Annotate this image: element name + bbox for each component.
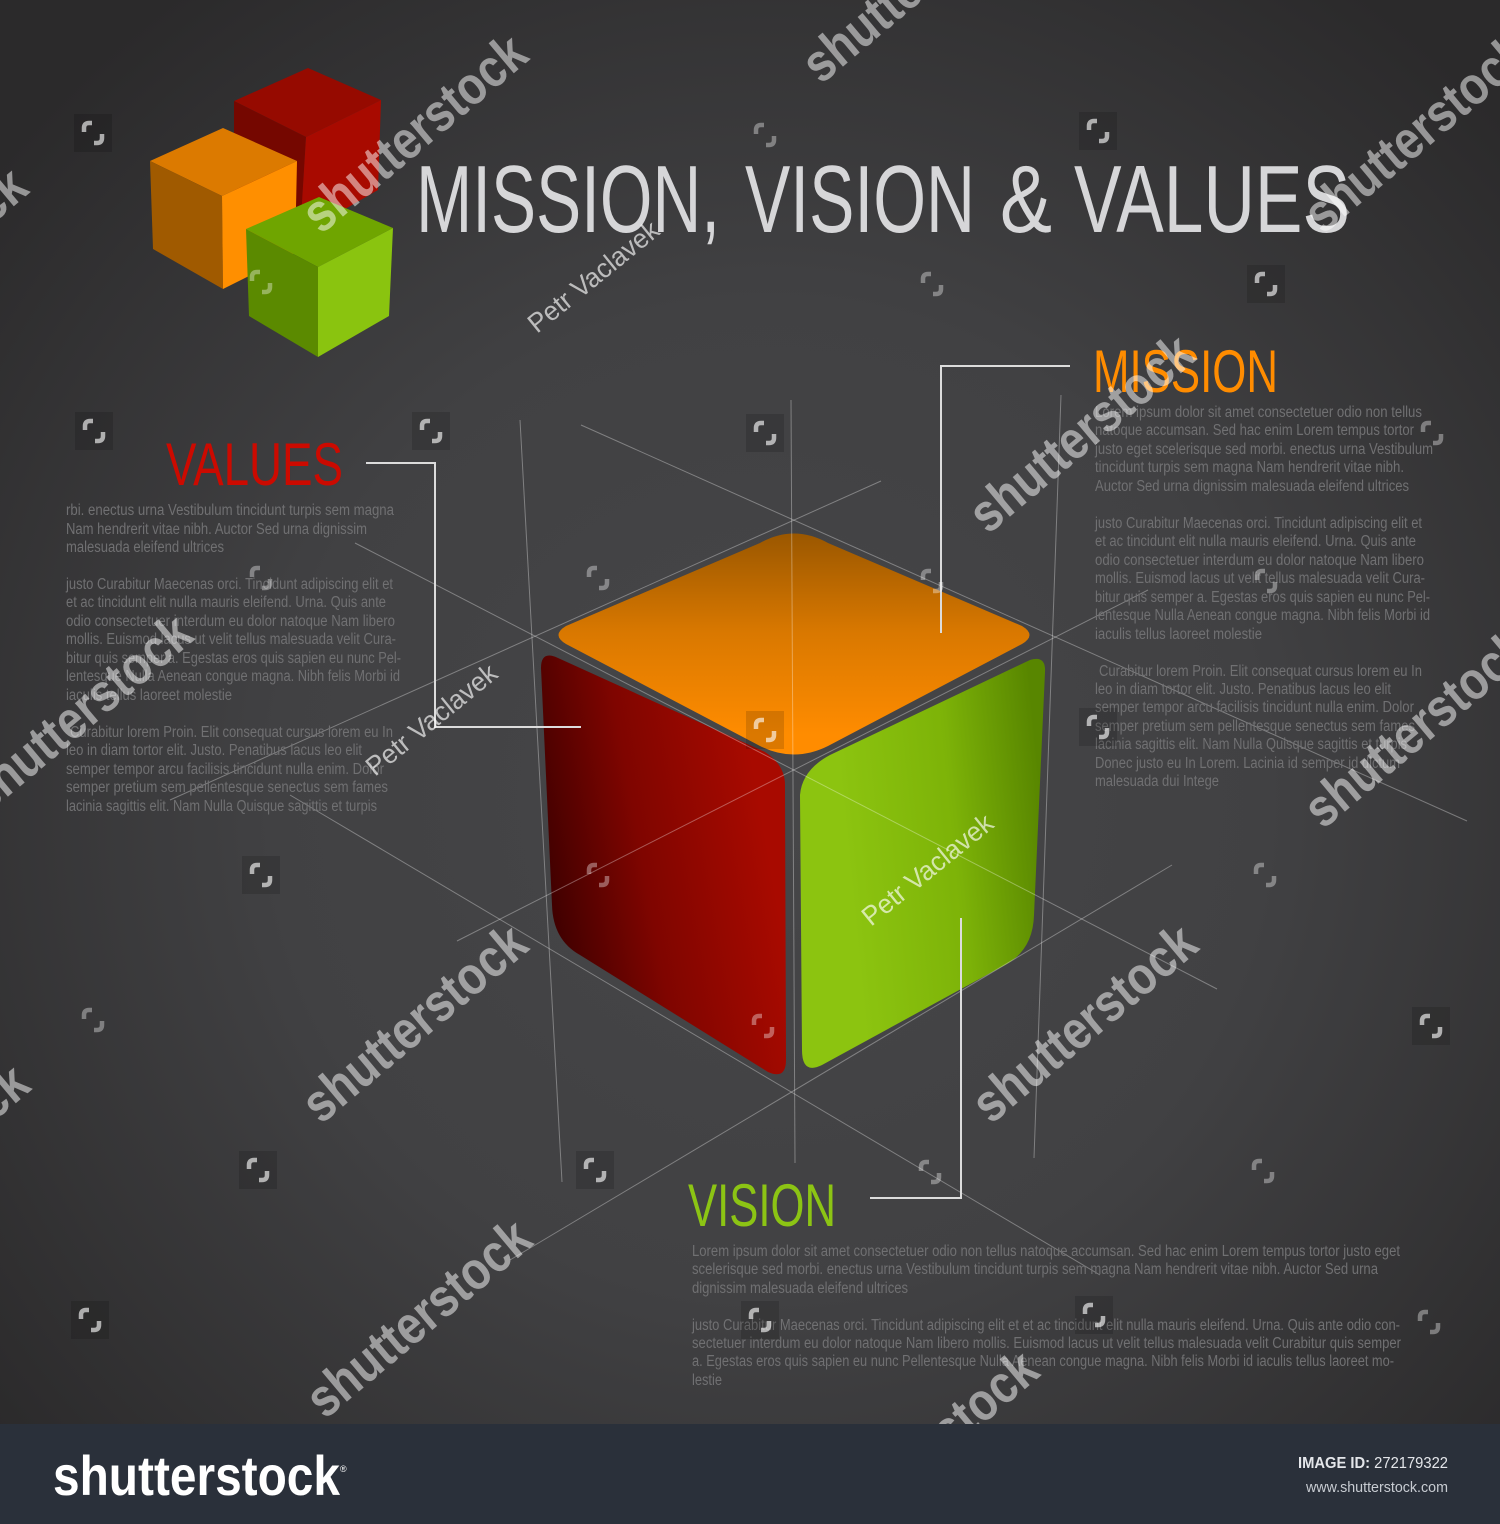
text block: mission: justo eget scelerisque sed morbi. enectus urna Vestibulum — [1094, 441, 1433, 458]
icon: three small cubes — [150, 68, 393, 357]
text block: vision — [691, 1243, 1401, 1389]
title: VISION — [745, 146, 975, 253]
title: MISSION, — [416, 146, 720, 253]
heading: vision: VISION — [688, 1172, 836, 1239]
text block: values: odio consectetuer interdum eu dolor natoque Nam libero — [66, 613, 395, 630]
watermark: author name: Petr Vaclavek — [522, 214, 665, 339]
text block: values: iaculis tellus laoreet molestie — [66, 687, 232, 704]
text block: mission: leo in diam tortor elit. Justo. Penatibus lacus leo elit — [1095, 681, 1392, 698]
cube face: mission orange — [558, 534, 1030, 754]
watermark: shutterstock text: shutterstock — [957, 322, 1206, 544]
text block: mission: Auctor Sed urna dignissim malesuada eleifend ultrices — [1095, 478, 1409, 495]
footer bar — [0, 1424, 1500, 1524]
text block: mission: Donec justo eu In Lorem. Lacinia id semper id dictum — [1095, 755, 1400, 772]
text block: mission: justo Curabitur Maecenas orci. Tincidunt adipiscing elit et — [1094, 515, 1423, 532]
watermark: author name: Petr Vaclavek — [360, 657, 503, 782]
watermark: shutterstock text: shutterstock — [290, 912, 539, 1134]
watermark: shutterstock text: shutterstock — [960, 912, 1209, 1134]
cube face: values red — [541, 656, 786, 1074]
text block: mission: malesuada dui Intege — [1095, 773, 1219, 790]
heading: mission: MISSION — [1093, 338, 1278, 405]
watermark: shutterstock text: shutterstock — [294, 1207, 543, 1429]
text block: values: lentesque Nulla Aenean congue magna. Nibh felis Morbi id — [66, 668, 400, 685]
text block: values: mollis. Euismod lacus ut velit tellus malesuada velit Cura- — [66, 631, 396, 648]
text block: mission — [1094, 404, 1433, 790]
text block: vision: dignissim malesuada eleifend ultrices — [692, 1280, 908, 1297]
text block: mission: natoque accumsan. Sed hac enim Lorem tempus tortor — [1095, 422, 1414, 439]
text block: vision: scelerisque sed morbi. enectus urna Vestibulum tincidunt turpis sem magna Nam hendrerit vitae nibh. Auctor Sed urna — [692, 1261, 1378, 1278]
text block: values: Nam hendrerit vitae nibh. Auctor Sed urna dignissim — [66, 521, 367, 538]
text block: values: et ac tincidunt elit nulla mauris eleifend. Urna. Quis ante — [66, 594, 386, 611]
text block: mission: Curabitur lorem Proin. Elit consequat cursus lorem eu In — [1099, 663, 1422, 680]
text block: mission: tincidunt turpis sem magna Nam hendrerit vitae nibh. — [1095, 459, 1404, 476]
heading: values: VALUES — [166, 431, 343, 498]
text block: values: semper tempor arcu facilisis tincidunt nulla enim. Dolor — [66, 761, 384, 778]
text block: values: Curabitur lorem Proin. Elit consequat cursus lorem eu In — [70, 724, 393, 741]
text block: values: rbi. enectus urna Vestibulum tincidunt turpis sem magna — [66, 502, 394, 519]
text block: mission: Lorem ipsum dolor sit amet consectetuer odio non tellus — [1095, 404, 1422, 421]
text block: values — [65, 502, 401, 815]
callout line: vision — [870, 918, 961, 1198]
title: & — [1000, 146, 1052, 253]
footer logo registered mark: ® — [340, 1464, 347, 1474]
title: VALUES — [1074, 146, 1350, 253]
text block: values: leo in diam tortor elit. Justo. Penatibus lacus leo elit — [66, 742, 363, 759]
text block: values: justo Curabitur Maecenas orci. Tincidunt adipiscing elit et — [65, 576, 394, 593]
text block: mission: mollis. Euismod lacus ut velit tellus malesuada velit Cura- — [1095, 570, 1425, 587]
footer image id: IMAGE ID: 272179322 — [1298, 1455, 1448, 1472]
text block: vision: lestie — [692, 1372, 722, 1389]
watermark: corner icons — [81, 121, 1441, 1332]
callout line: mission — [941, 366, 1070, 633]
footer logo: shutterstock — [53, 1444, 341, 1507]
text block: values: lacinia sagittis elit. Nam Nulla Quisque sagittis et turpis — [66, 798, 377, 815]
text block: mission: semper tempor arcu facilisis tincidunt nulla enim. Dolor — [1095, 699, 1414, 716]
text block: mission: semper pretium sem pellentesque senectus sem fames — [1095, 718, 1415, 735]
text block: values: bitur quis semper a. Egestas eros quis sapien eu nunc Pel- — [66, 650, 401, 667]
text block: mission: iaculis tellus laoreet molestie — [1095, 626, 1262, 643]
text block: mission: bitur quis semper a. Egestas eros quis sapien eu nunc Pel- — [1095, 589, 1430, 606]
callout line: values — [366, 463, 581, 727]
title — [416, 146, 1350, 253]
watermark: author name — [360, 214, 999, 932]
cube face: vision green — [800, 659, 1045, 1068]
text block: mission: lacinia sagittis elit. Nam Nulla Quisque sagittis et turpis — [1095, 736, 1407, 753]
text block: values: malesuada eleifend ultrices — [66, 539, 224, 556]
text block: mission: et ac tincidunt elit nulla mauris eleifend. Urna. Quis ante — [1095, 533, 1416, 550]
text block: mission: lentesque Nulla Aenean congue magna. Nibh felis Morbi id — [1095, 607, 1430, 624]
watermark: dark squares behind icons — [71, 112, 1450, 1339]
text block: values: semper pretium sem pellentesque senectus sem fames — [66, 779, 388, 796]
footer website: www.shutterstock.com — [1305, 1480, 1448, 1496]
wireframe guide lines — [170, 395, 1467, 1275]
watermark: author name: Petr Vaclavek — [856, 807, 999, 932]
text block: mission: odio consectetuer interdum eu dolor natoque Nam libero — [1095, 552, 1424, 569]
